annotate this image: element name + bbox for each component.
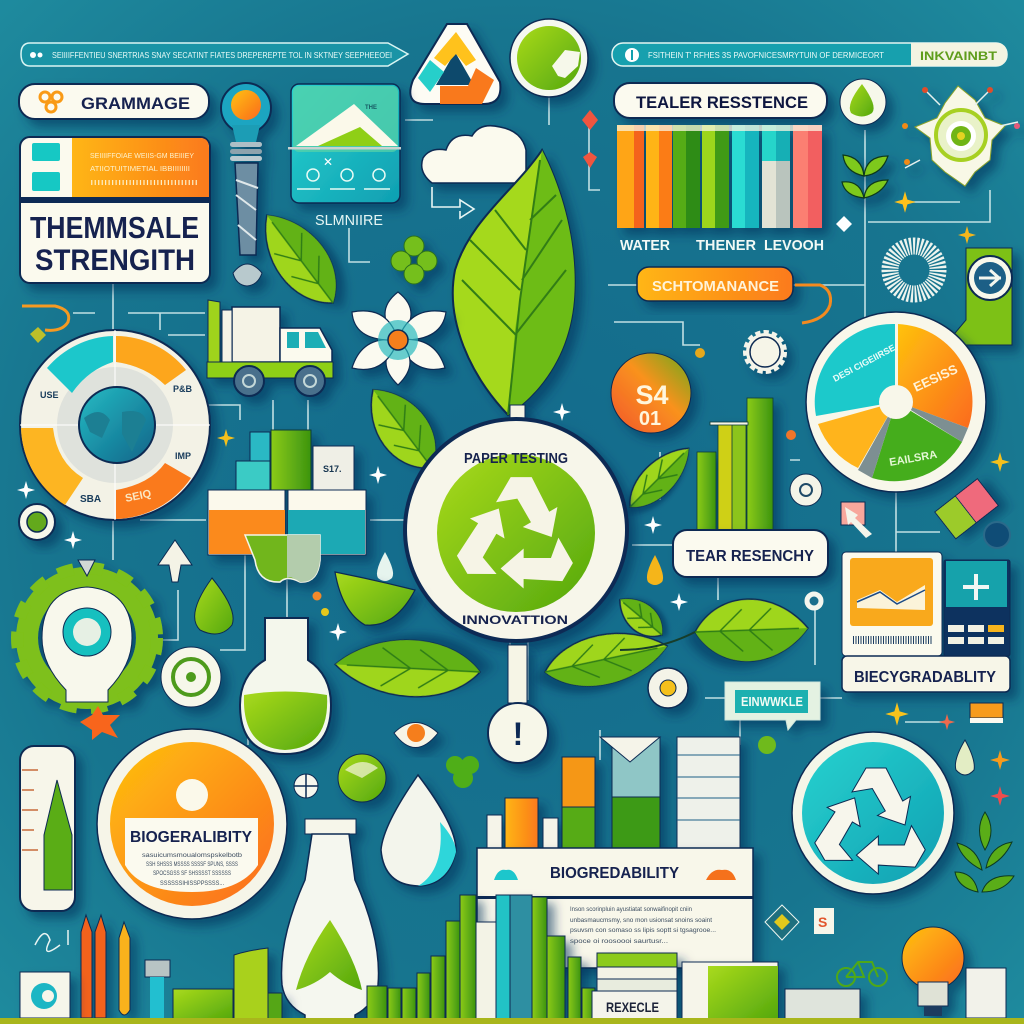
icon: stars and markers right (17, 348, 1010, 641)
icon: plant (955, 812, 1014, 892)
icon: big recycle badge (792, 732, 954, 894)
panel: grammage pill (19, 84, 209, 119)
icon: green tag with circle (945, 248, 1012, 345)
panel: thermal strength card: IIIIIIIIIIIIIIIIIIIIIIIIIIIIIII (90, 178, 198, 187)
icon: large central leaf (453, 150, 575, 415)
panel: mini chart card: THE (365, 105, 377, 111)
panel: biogeralibity badge: sasuicumsmoualomspskelbotb (142, 852, 242, 859)
panel: biogredability text card: unbasmaucmsmy, sno mon usionsat snoins soaint (570, 917, 712, 924)
label: einwwkle tag (725, 682, 820, 730)
icon: sprout (842, 155, 888, 198)
panel: mini chart card (288, 84, 401, 203)
panel: thermal strength card: THEMMSALE (30, 210, 199, 245)
icon: top recycle triangle (410, 24, 500, 104)
icon: small column (145, 960, 170, 1019)
icon: magnifier stem (488, 645, 548, 763)
icon: orange ball (611, 353, 691, 433)
label: chart axis: LEVOOH (764, 237, 824, 254)
icon: stacked boxes (208, 430, 366, 582)
icon: magnifier stem: ! (513, 716, 523, 752)
icon: green splat (446, 756, 479, 788)
icon: pencils (81, 915, 130, 1018)
chart: left donut with globe: P&B (173, 384, 193, 394)
icon: light bulb pin (221, 83, 271, 286)
icon: diamond tile and s tile (765, 905, 834, 940)
label: einwwkle tag: EINWWKLE (741, 694, 803, 709)
icon: white block (966, 968, 1006, 1018)
top right banner: INKVAINBT (920, 49, 998, 63)
top left banner: SEIIIIFFENTIEU SNERTRIAS SNAY SECATINT FIATES DREPEREPTE TOL IN SKTNEY SEEPHEEOEI (52, 50, 392, 60)
panel: biodegradability calculator: BIECYGRADABLITY (854, 669, 996, 686)
icon: white drop (377, 552, 393, 581)
chart: right pie: DESI CIGEIIRSE (831, 343, 897, 384)
icon: stacked boxes: S17. (323, 464, 342, 474)
chart: left donut with globe: IMP (175, 451, 191, 461)
icon: arrow (432, 187, 474, 218)
panel: tear resenchy pill: TEAR RESENCHY (686, 548, 814, 565)
label: chart axis (620, 237, 824, 254)
panel: biogredability text card: spoce oi roosoooi saurtusr... (570, 938, 668, 945)
icon: squiggle (35, 930, 68, 951)
panel: grammage pill: GRAMMAGE (81, 94, 190, 113)
panel: tear resenchy pill (673, 530, 828, 577)
panel: thermal strength card (20, 137, 210, 283)
panel: biodegradability calculator (842, 552, 1010, 692)
icon: red diamonds (582, 110, 598, 168)
icon: flower (352, 292, 446, 385)
icon: diamond tile and s tile: S (818, 914, 827, 930)
label: slmniire: SLMNIIRE (315, 212, 383, 229)
icon: drop badge (840, 79, 886, 125)
label: chart axis: WATER (620, 237, 670, 254)
icon: white diamond (836, 216, 852, 232)
icon: light bulb (902, 927, 964, 1016)
chart: left donut with globe: SEIQ (124, 488, 153, 505)
panel: tear resistance pill (614, 83, 827, 118)
panel: biogeralibity badge: SSH SHSSS MSSSS SSSSF SPUNS, SSSS (146, 861, 238, 868)
icon: box stack rexecule (592, 953, 677, 1019)
icon: box stack rexecule: REXECLE (606, 999, 659, 1015)
panel: biogeralibity badge: BIOGERALIBITY (130, 829, 252, 846)
icon: gear with bulb (17, 560, 157, 708)
icon: bike (837, 962, 887, 986)
icon: globe (510, 19, 588, 97)
icon: green drop leaf (195, 578, 233, 634)
icon: orange ball: S4 (635, 380, 669, 410)
panel: thermal strength card: STRENGITH (35, 244, 195, 277)
chart: left donut with globe (20, 330, 210, 520)
chart: right pie: EESISS (911, 361, 960, 395)
icon: target badge left (19, 504, 55, 540)
icon: leaf right of hub (619, 437, 700, 518)
icon: orange marker (394, 722, 438, 748)
panel: biogeralibity badge (97, 729, 287, 919)
icon: cog badge (902, 86, 1020, 186)
icon: leaves row (334, 572, 809, 700)
icon: thermometer (20, 746, 75, 911)
icon: left hook with cube (22, 306, 69, 343)
bar chart: green growth (697, 398, 773, 530)
bar chart: water levels (617, 125, 822, 228)
icon: gear (746, 333, 784, 371)
icon: cross dot (294, 774, 318, 798)
top right banner: FSITHEIN T' RFHES 3S PAVOFNICESMRYTUIN OF DERMICEORT (648, 50, 884, 60)
panel: thermal strength card: SEIIIIFFOIAE WEIIS-GM BEIIIEY (90, 151, 194, 160)
label: chart axis: THENER (696, 237, 756, 254)
panel: center hub paper testing: INNOVATTION (462, 613, 568, 627)
icon: small leaf by hub (353, 375, 452, 483)
panel: biogredability text card: BIOGREDABILITY (550, 865, 679, 882)
chart: right pie (806, 312, 986, 492)
panel: center hub paper testing (405, 405, 627, 641)
connector lines (73, 97, 990, 760)
panel: mini chart card: ✕ (323, 155, 333, 169)
icon: orange splat (80, 706, 120, 740)
icon: truck (207, 300, 333, 396)
panel: thermal strength card: ATIIOTUITIMETIAL IBBIIIIIIII (90, 164, 190, 173)
icon: green ball (338, 754, 386, 802)
icon: clover (391, 236, 437, 284)
icon: orange ball: 01 (639, 408, 661, 430)
chart: right pie: EAILSRA (888, 449, 938, 469)
icon: left small leaf (247, 200, 353, 318)
panel: biogredability text card (477, 848, 753, 968)
icon: flask (240, 618, 331, 754)
top left banner (21, 43, 408, 66)
icon: small right tile (935, 479, 998, 539)
icon: right markers (758, 702, 1010, 806)
icon: large drop (381, 775, 456, 886)
bar chart: bottom green bars (367, 895, 595, 1019)
panel: biogeralibity badge: SSSSSSIHISSPPSSSS... (160, 880, 224, 887)
icon: green blocks bottom (173, 948, 282, 1019)
panel: biogredability text card: psuvsm con somaso ss lipis soptt si tgsagrooe... (570, 927, 716, 934)
icon: bottle (281, 819, 379, 1024)
chart: left donut with globe: USE (40, 390, 59, 400)
icon: white wreath (890, 246, 938, 294)
icon: gold star (894, 191, 916, 213)
icon: cloud (422, 126, 526, 183)
panel: schtomanance pill (637, 267, 793, 301)
icon: yellow drop (647, 555, 663, 585)
icon: green badge (161, 647, 221, 707)
icon: green block (682, 962, 860, 1019)
icon: gold star small (958, 226, 976, 244)
panel: schtomanance pill: SCHTOMANANCE (652, 278, 779, 295)
icon: up arrow (158, 540, 192, 582)
panel: tear resistance pill: TEALER RESSTENCE (636, 93, 808, 112)
icon: hook (795, 285, 831, 323)
panel: center hub paper testing: PAPER TESTING (464, 450, 568, 467)
bar chart: biogredability top bars (487, 737, 740, 848)
icon: yellow circle marker (648, 668, 688, 708)
chart: left donut with globe: SBA (80, 494, 101, 505)
panel: biogeralibity badge: SPOCSGSS SF SHSSSST SSSSSS (153, 870, 231, 877)
bottom stripe (0, 1018, 1024, 1024)
top right banner (612, 43, 1007, 66)
panel: biogredability text card: Inson scorinpluin ayustiatat sonwaifinopit cniin (570, 906, 692, 913)
icon: small square (20, 972, 70, 1018)
